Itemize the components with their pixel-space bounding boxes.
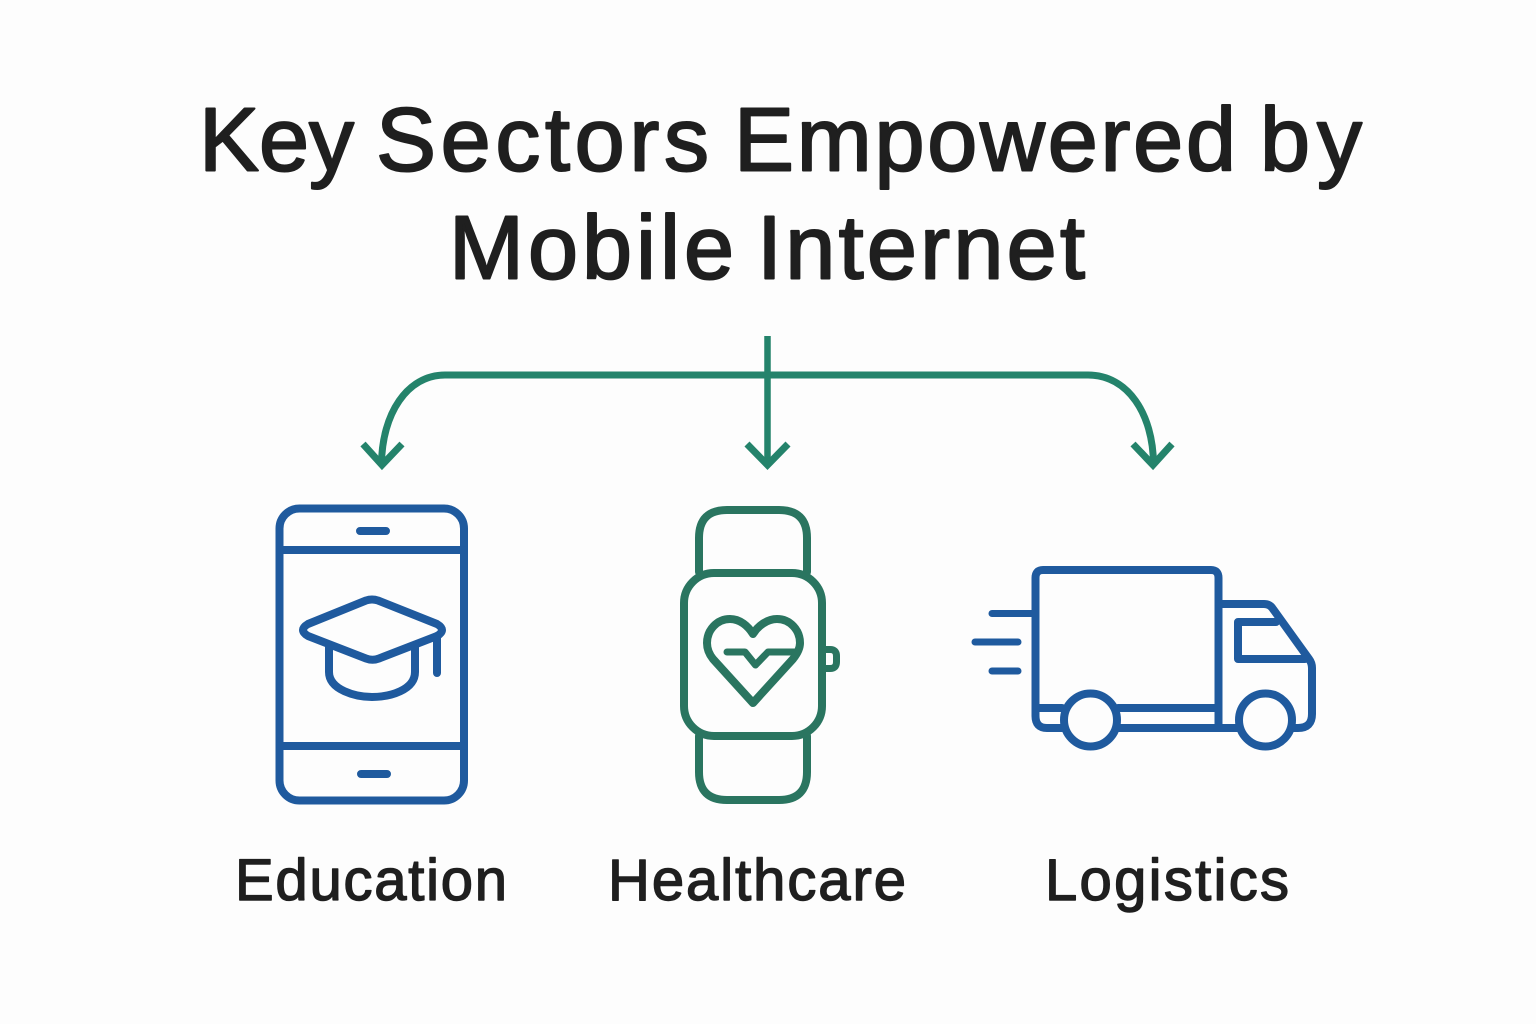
title: Internet [757, 198, 1085, 298]
cargo box [1036, 570, 1238, 728]
title: Sectors [376, 90, 709, 190]
label: Education: Education [235, 848, 507, 913]
heartbeat line [727, 652, 797, 665]
arrow: right branch [767, 375, 1172, 465]
wheels [1064, 694, 1117, 746]
title: Empowered [734, 90, 1236, 190]
cab [1219, 604, 1312, 728]
watch straps [699, 510, 807, 572]
phone body [280, 508, 464, 800]
graduation cap [303, 600, 442, 697]
title: Key [199, 90, 354, 190]
cab window [1238, 622, 1305, 659]
watch case [684, 573, 822, 736]
title: Mobile [449, 198, 734, 298]
icon: delivery truck [975, 570, 1312, 746]
branching arrows [363, 336, 1172, 465]
label: Healthcare: Healthcare [608, 848, 906, 913]
heart [707, 619, 800, 703]
icon: smartwatch with heart [684, 510, 836, 800]
watch crown [826, 650, 836, 668]
title: by [1260, 90, 1362, 190]
phone screen dividers [280, 550, 463, 746]
title [199, 90, 1362, 298]
icon: phone with graduation cap [280, 508, 464, 800]
speed lines [975, 614, 1034, 671]
arrow: centre stem [747, 336, 788, 465]
label: Logistics: Logistics [1045, 848, 1289, 913]
phone speaker and home button [360, 531, 387, 774]
arrow: left branch [363, 375, 767, 465]
